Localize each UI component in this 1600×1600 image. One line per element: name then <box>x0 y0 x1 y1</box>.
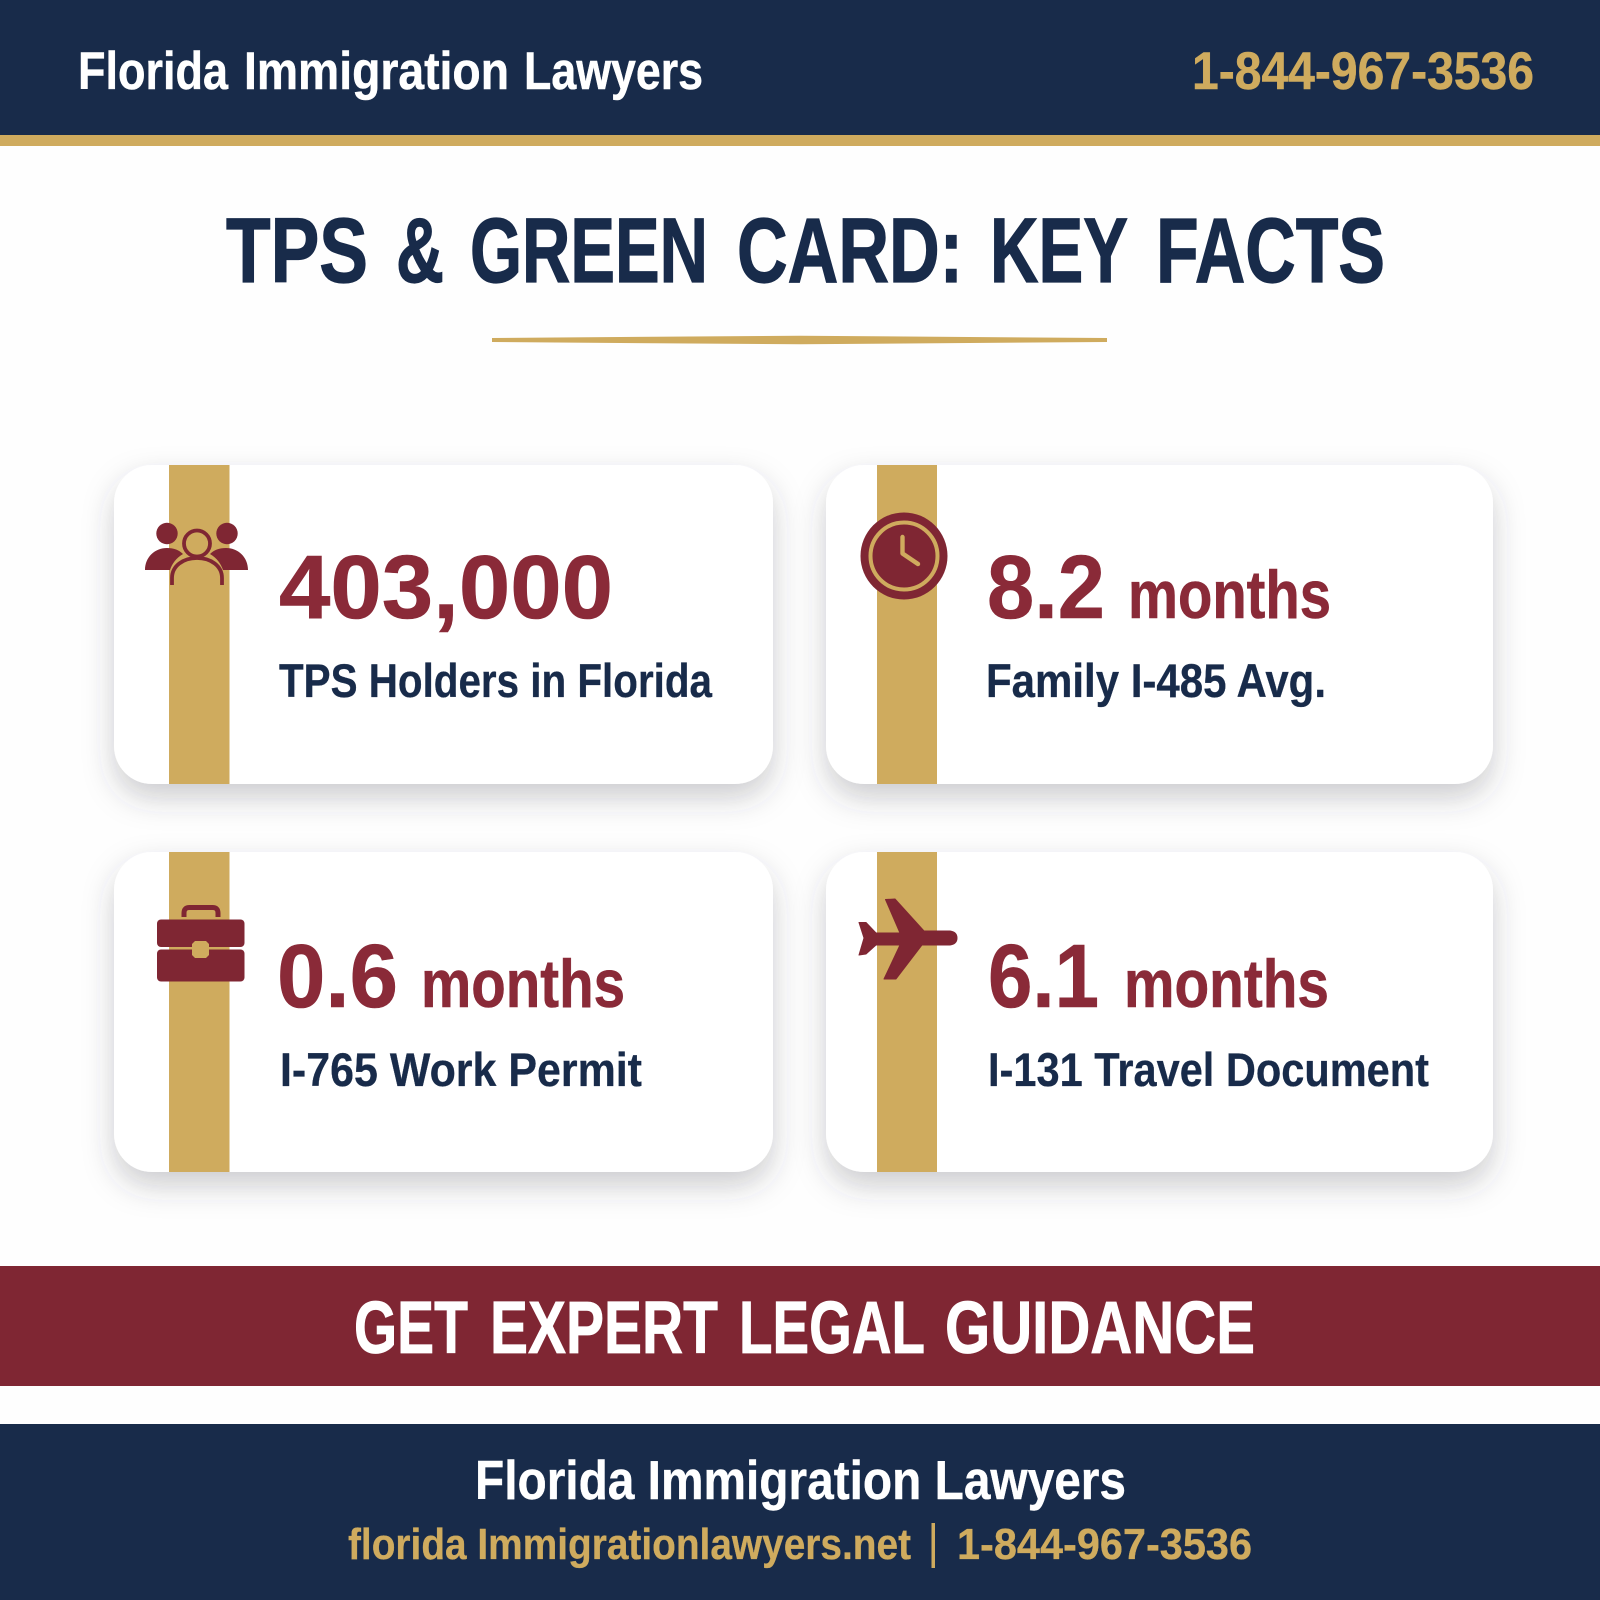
title underline <box>492 336 1107 344</box>
title: FACTS <box>1156 200 1385 302</box>
icon: people <box>145 523 248 585</box>
title: GREEN <box>470 200 708 302</box>
title <box>226 200 1385 302</box>
header firm name: Lawyers <box>524 42 703 101</box>
call to action text: EXPERT <box>490 1286 718 1369</box>
panel: Family I-485 <box>826 465 1493 784</box>
label: TPS Holders in Florida: TPS Holders in Florida <box>279 654 713 707</box>
title: TPS <box>226 200 368 302</box>
footer firm name: Florida Immigration Lawyers <box>475 1449 1126 1511</box>
header firm name <box>78 42 703 101</box>
panel: I-131 travel document <box>826 852 1493 1172</box>
call to action text: LEGAL <box>739 1286 925 1369</box>
panel: TPS holders <box>114 465 773 784</box>
statistic: 8.2 months: months <box>1128 557 1331 633</box>
footer bar <box>0 1424 1600 1600</box>
statistic: 0.6 months <box>277 927 625 1027</box>
statistic: 6.1 months <box>988 927 1329 1027</box>
footer website and phone: florida Immigrationlawyers.net <box>348 1520 911 1569</box>
statistic: 8.2 months <box>987 538 1331 638</box>
footer website and phone: 1-844-967-3536 <box>957 1520 1252 1569</box>
call to action banner <box>0 1266 1600 1386</box>
statistic: 0.6 months: months <box>421 946 625 1022</box>
label: Family I-485 Avg.: Family I-485 Avg. <box>986 654 1326 707</box>
call to action text: GUIDANCE <box>945 1286 1255 1369</box>
label: I-131 Travel Document: I-131 Travel Document <box>988 1043 1429 1096</box>
title: CARD: <box>737 200 963 302</box>
icon: airplane <box>859 899 957 979</box>
title: & <box>396 200 444 302</box>
statistic: 6.1 months: months <box>1124 946 1329 1022</box>
statistic: 8.2 months: 8.2 <box>987 538 1105 638</box>
label: I-765 Work Permit: I-765 Work Permit <box>280 1043 642 1096</box>
statistic: 403,000: 403,000 <box>279 538 613 638</box>
title: KEY <box>990 200 1128 302</box>
call to action text <box>354 1286 1255 1369</box>
header phone number: 1-844-967-3536 <box>1192 42 1534 101</box>
call to action text: GET <box>354 1286 468 1369</box>
icon: clock <box>860 512 948 600</box>
statistic: 6.1 months: 6.1 <box>988 927 1099 1027</box>
statistic: 0.6 months: 0.6 <box>277 927 398 1027</box>
panel: I-765 work permit <box>114 852 773 1172</box>
header firm name: Florida <box>78 42 228 101</box>
header bar <box>0 0 1600 146</box>
header firm name: Immigration <box>244 42 509 101</box>
icon: briefcase <box>157 908 244 982</box>
